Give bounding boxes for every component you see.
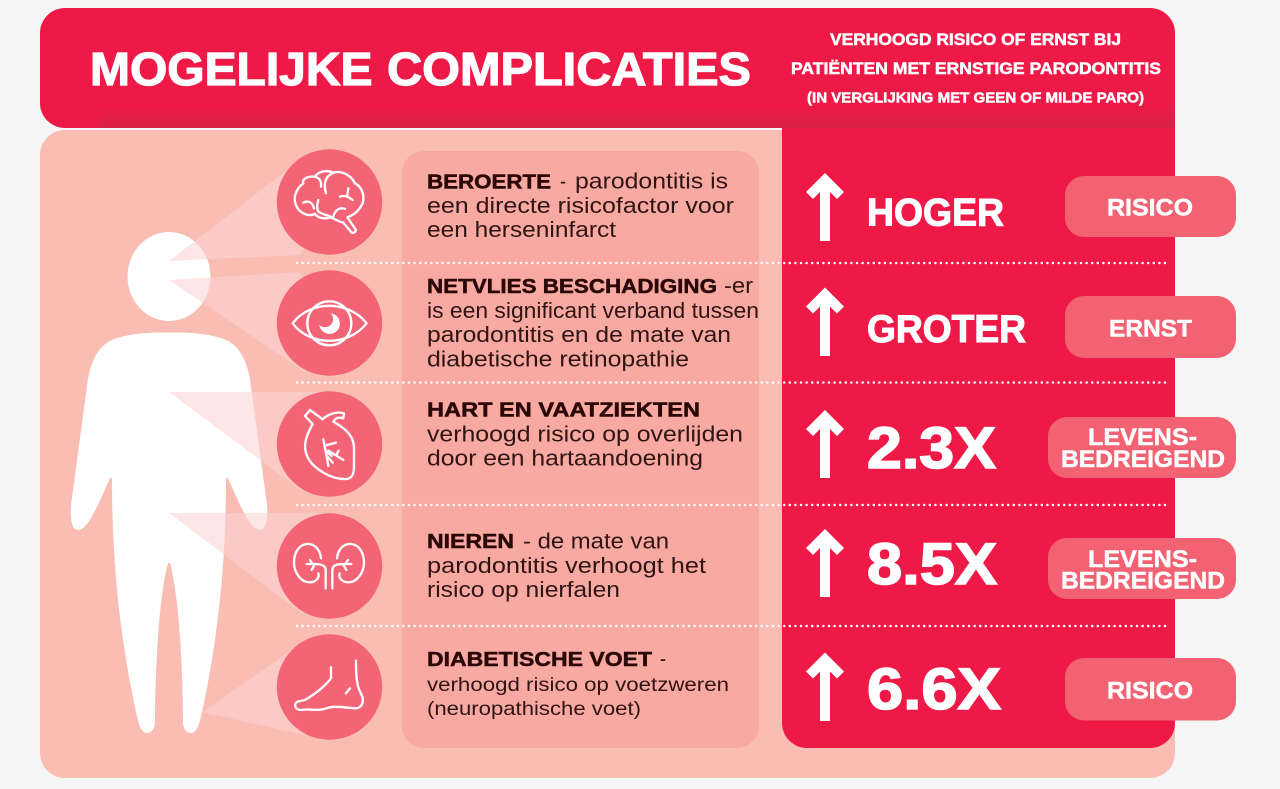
text: nieren: parodontitis verhoogt het xyxy=(427,553,706,578)
text: nieren: NIEREN xyxy=(427,531,514,553)
value: HOGER: HOGER xyxy=(867,192,1004,234)
panel: text column xyxy=(402,151,759,748)
text: netvlies beschadiging: diabetische retinopathie xyxy=(427,346,689,372)
text: netvlies beschadiging: is een significant verband tussen xyxy=(427,298,759,323)
icon: brain xyxy=(277,149,382,255)
text: hart en vaatziekten: HART EN VAATZIEKTEN xyxy=(427,400,700,422)
text: netvlies beschadiging: parodontitis en de mate van xyxy=(427,322,731,347)
badge: risico 2: RISICO xyxy=(1107,678,1193,704)
badge: risico 2 xyxy=(1065,658,1236,720)
icon: kidneys xyxy=(277,513,382,619)
connector beams xyxy=(169,160,330,735)
badge: risico: RISICO xyxy=(1107,194,1193,222)
header subtitle: (IN VERGLIJKING MET GEEN OF MILDE PARO) xyxy=(807,90,1144,106)
text: diabetische voet: - xyxy=(660,646,666,671)
text: netvlies beschadiging: -er xyxy=(724,273,753,298)
text: beroerte: een herseninfarct xyxy=(427,217,616,242)
text: netvlies beschadiging xyxy=(427,273,759,372)
panel: peach background xyxy=(40,130,1175,778)
value: 6.6X: 6.6X xyxy=(867,657,1001,722)
badge: levensbedreigend 2: LEVENS- xyxy=(1088,546,1197,573)
header subtitle: PATIËNTEN MET ERNSTIGE PARODONTITIS xyxy=(791,60,1161,78)
value: 2.3X: 2.3X xyxy=(867,416,996,481)
arrow: row 2 xyxy=(806,288,844,356)
badge: levensbedreigend 1: LEVENS- xyxy=(1088,424,1197,451)
text: beroerte: parodontitis is xyxy=(575,168,728,194)
header banner xyxy=(40,8,1175,128)
arrow: row 3 xyxy=(806,410,844,478)
icon: foot xyxy=(277,634,382,740)
badge: risico xyxy=(1065,176,1236,237)
title: MOGELIJKE xyxy=(90,43,372,95)
text: diabetische voet: DIABETISCHE VOET xyxy=(427,649,652,671)
arrow: row 5 xyxy=(806,652,844,721)
title: COMPLICATIES xyxy=(387,43,751,95)
badge: ernst xyxy=(1065,296,1236,358)
human figure xyxy=(71,232,267,733)
badge: levensbedreigend 1 xyxy=(1048,417,1236,478)
header subtitle: VERHOOGD RISICO OF ERNST BIJ xyxy=(830,31,1121,49)
text: hart en vaatziekten: verhoogd risico op overlijden xyxy=(427,422,743,446)
text: beroerte: BEROERTE xyxy=(427,172,551,194)
value: 8.5X: 8.5X xyxy=(867,532,997,597)
value: GROTER: GROTER xyxy=(867,308,1026,351)
arrow: row 4 xyxy=(806,529,844,597)
text: netvlies beschadiging: NETVLIES BESCHADIGING xyxy=(427,276,717,298)
text: beroerte: - xyxy=(560,168,566,194)
badge: levensbedreigend 2: BEDREIGEND xyxy=(1061,568,1225,594)
text: nieren: - de mate van xyxy=(523,528,669,554)
badge: levensbedreigend 2 xyxy=(1048,538,1236,599)
text: diabetische voet: (neuropathische voet) xyxy=(427,698,641,720)
text: nieren xyxy=(427,528,706,602)
text: diabetische voet: verhoogd risico op voetzweren xyxy=(427,674,729,696)
panel: red risk column xyxy=(782,128,1175,748)
title xyxy=(90,43,751,95)
header subtitle xyxy=(791,31,1161,106)
icon: heart xyxy=(277,391,382,497)
badge: levensbedreigend 1: BEDREIGEND xyxy=(1061,446,1225,473)
text: diabetische voet xyxy=(427,646,729,720)
text: beroerte: een directe risicofactor voor xyxy=(427,193,734,218)
text: hart en vaatziekten xyxy=(427,400,743,470)
arrow: row 1 xyxy=(806,173,844,241)
text: beroerte xyxy=(427,168,734,242)
text: nieren: risico op nierfalen xyxy=(427,577,620,602)
icon: eye xyxy=(277,270,382,376)
badge: ernst: ERNST xyxy=(1109,316,1192,342)
text: hart en vaatziekten: door een hartaandoening xyxy=(427,446,703,470)
